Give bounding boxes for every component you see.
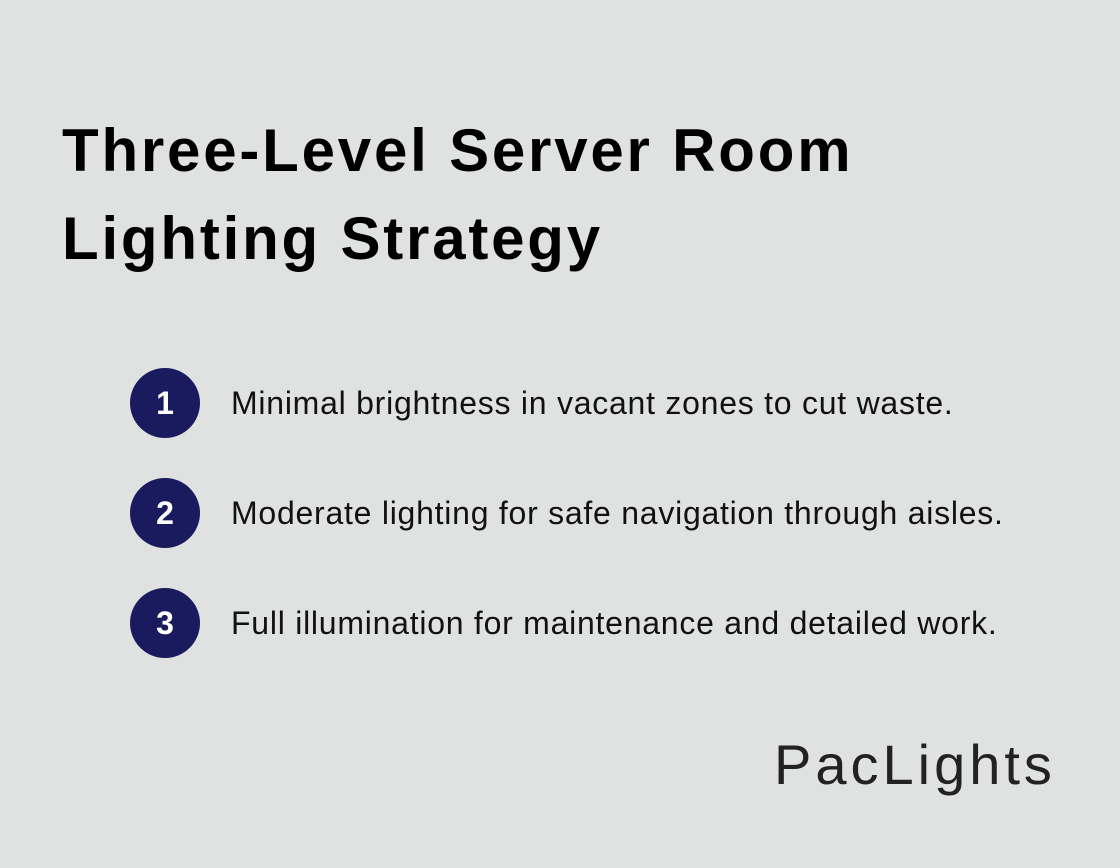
item 2 xyxy=(130,478,1004,548)
badge 1 xyxy=(130,368,200,438)
badge 3: 3 xyxy=(156,605,174,641)
logo: PacLights xyxy=(774,733,1056,796)
badge 2 xyxy=(130,478,200,548)
badge 3 xyxy=(130,588,200,658)
badge 2: 2 xyxy=(156,495,174,531)
text 1: Minimal brightness in vacant zones to cut waste. xyxy=(231,385,954,421)
text 3: Full illumination for maintenance and detailed work. xyxy=(231,605,998,641)
title: Three-Level Server Room xyxy=(62,117,853,184)
title: Lighting Strategy xyxy=(62,205,603,272)
item 1 xyxy=(130,368,954,438)
title xyxy=(62,117,853,272)
text 2: Moderate lighting for safe navigation through aisles. xyxy=(231,495,1004,531)
item 3 xyxy=(130,588,998,658)
badge 1: 1 xyxy=(156,385,174,421)
